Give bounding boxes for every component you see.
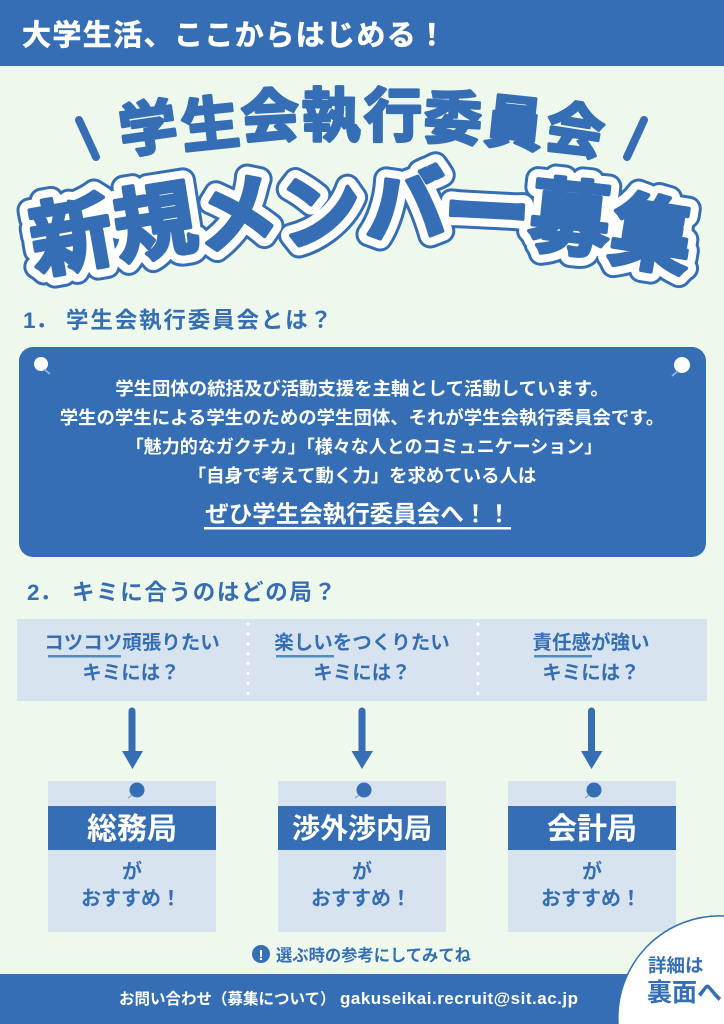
footer contact band: gakuseikai.recruit@sit.ac.jp [340, 989, 578, 1008]
title: committee name arched: 学 [115, 93, 181, 166]
heading: section 1: 1． [23, 308, 58, 333]
footer contact band: お問い合わせ（募集について） [119, 990, 336, 1008]
title: new member recruitment outlined: ー [440, 162, 533, 265]
corner callout: see reverse: 詳細は [648, 955, 704, 976]
corner callout: see reverse: 裏面へ [647, 979, 722, 1007]
question 3: 責任感が強い [532, 631, 650, 654]
title: new member recruitment outlined: 新 [23, 186, 120, 289]
title: committee name arched: 会 [541, 95, 609, 168]
title: new member recruitment outlined: ン [275, 163, 366, 262]
icon: right pin [672, 357, 690, 376]
card: accounting [508, 781, 676, 932]
title: committee name arched: 委 [422, 86, 484, 153]
title: new member recruitment outlined: 規 [108, 173, 203, 276]
title: committee name arched: 行 [364, 84, 422, 149]
title: new member recruitment outlined: ン [275, 163, 366, 262]
card: general affairs [48, 781, 216, 932]
title: new member recruitment outlined: 募 [524, 171, 615, 270]
question 2 [274, 632, 450, 684]
card: external and internal affairs [278, 781, 446, 932]
question 1: キミには？ [82, 662, 180, 684]
title: committee name arched: 生 [178, 90, 242, 161]
title: new member recruitment outlined: 集 [604, 185, 699, 288]
note with exclamation icon: ! [258, 947, 264, 964]
title: new member recruitment outlined: 新 [23, 186, 120, 289]
title: new member recruitment outlined: メ [189, 165, 283, 266]
question 1 [44, 632, 220, 684]
top banner [0, 0, 724, 66]
title: new member recruitment outlined: ン [275, 163, 366, 262]
card: accounting: 会計局 [547, 813, 637, 846]
title: new member recruitment outlined: 規 [108, 173, 203, 276]
corner callout: see reverse [618, 916, 724, 1024]
card: general affairs: が [122, 859, 142, 883]
title: new member recruitment outlined [23, 160, 699, 289]
card: external and internal affairs: おすすめ！ [311, 887, 411, 910]
top banner: 大学生活、ここからはじめる！ [22, 19, 448, 52]
panel: about the committee [19, 347, 706, 557]
title: new member recruitment outlined: 規 [108, 173, 203, 276]
card: accounting: おすすめ！ [541, 887, 641, 910]
panel body text: 学生の学生による学生のための学生団体、それが学生会執行委員会です。 [60, 407, 664, 428]
question 2: 楽しいをつくりたい [274, 632, 450, 654]
title: new member recruitment outlined: バ [362, 160, 448, 255]
panel: questions band [17, 619, 707, 701]
title: new member recruitment outlined: 集 [604, 185, 699, 288]
title: new member recruitment outlined: メ [189, 165, 283, 266]
note with exclamation icon: 選ぶ時の参考にしてみてね [276, 946, 472, 965]
panel body text: 学生団体の統括及び活動支援を主軸として活動しています。 [115, 378, 609, 399]
panel body text: 「魅力的なガクチカ」「様々な人とのコミュニケーション」 [126, 436, 602, 457]
card: general affairs: おすすめ！ [81, 887, 181, 910]
title: new member recruitment outlined: 募 [524, 171, 615, 270]
arrow 1 [122, 708, 143, 769]
arrow 3 [581, 708, 602, 769]
footer contact band [0, 974, 724, 1024]
card: general affairs: 総務局 [87, 813, 177, 846]
right accent stroke [627, 120, 644, 157]
title: new member recruitment outlined: 新 [23, 186, 120, 289]
left accent stroke [79, 120, 96, 157]
card: external and internal affairs: 渉外渉内局 [292, 813, 432, 844]
title: committee name arched [115, 84, 609, 168]
panel call to action: ぜひ学生会執行委員会へ！！ [205, 501, 511, 527]
question 2: キミには？ [313, 662, 411, 684]
card: external and internal affairs: が [352, 859, 372, 883]
icon: left pin [34, 357, 50, 374]
heading: section 2: キミに合うのはどの局？ [72, 580, 336, 605]
arrow 2 [352, 708, 373, 769]
title: new member recruitment outlined: ー [440, 162, 533, 265]
heading: section 2: 2． [27, 580, 62, 605]
question 3 [532, 631, 650, 684]
heading: section 1: 学生会執行委員会とは？ [66, 308, 332, 333]
title: new member recruitment outlined: 募 [524, 171, 615, 270]
title: committee name arched: 執 [302, 84, 360, 149]
panel body text: 「自身で考えて動く力」を求めている人は [188, 465, 536, 486]
title: committee name arched: 員 [482, 89, 546, 160]
title: new member recruitment outlined: メ [189, 165, 283, 266]
title: new member recruitment outlined: バ [362, 160, 448, 255]
title: committee name arched: 会 [239, 84, 301, 151]
question 1: コツコツ頑張りたい [44, 632, 220, 654]
title: new member recruitment outlined: バ [362, 160, 448, 255]
card: accounting: が [582, 859, 602, 883]
panel body text [60, 378, 664, 486]
title: new member recruitment outlined: 集 [604, 185, 699, 288]
title: new member recruitment outlined: ー [440, 162, 533, 265]
question 3: キミには？ [542, 662, 640, 684]
